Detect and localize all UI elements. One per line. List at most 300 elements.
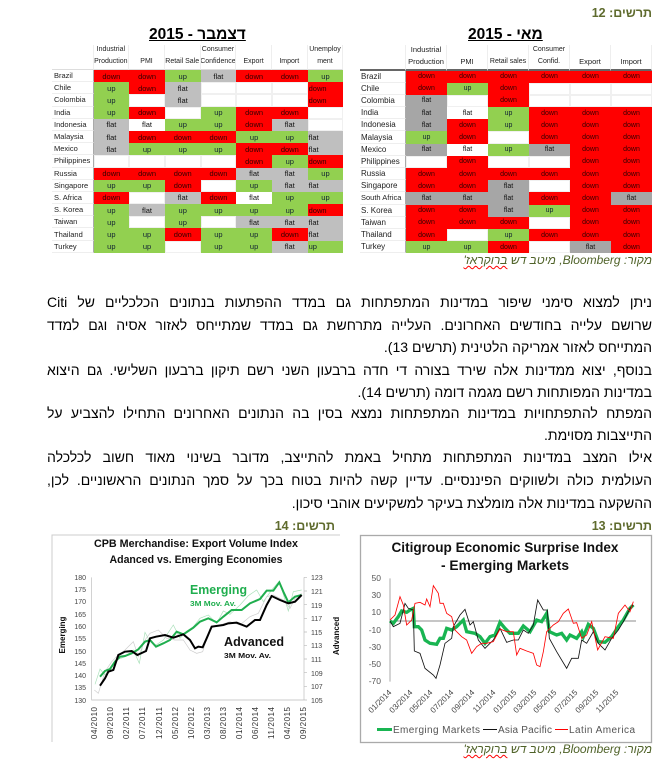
table: May 2015 heat map: down <box>623 244 640 251</box>
table: May 2015 heat map: flat <box>422 110 431 117</box>
table: December 2015 heat map: up <box>214 230 223 239</box>
chart 13 asia pacific line <box>390 600 633 678</box>
table: December 2015 heat map: Export <box>243 58 264 65</box>
chart 13 y axis labels: -30 <box>369 642 381 652</box>
table: May 2015 heat map: up <box>546 207 553 214</box>
table: May 2015 heat map: down <box>623 122 640 129</box>
chart 14 x axis labels: 01/2014 <box>235 706 244 739</box>
table: May 2015 heat map: down <box>623 110 640 117</box>
table: May 2015 heat map: down <box>418 207 435 214</box>
table: May 2015 heat map: down <box>582 207 599 214</box>
chart 14 x axis labels: 07/2011 <box>138 706 147 739</box>
chart 13 axes <box>390 578 636 682</box>
table: May 2015 heat map: flat <box>463 110 472 117</box>
table: December 2015 heat map: up <box>286 133 294 142</box>
chart 14 left axis labels: 140 <box>74 673 86 680</box>
chart 14 left axis labels: 170 <box>74 599 86 606</box>
chart 13 y axis labels: 50 <box>372 573 381 583</box>
table: May 2015 heat map: Thailand <box>361 230 392 239</box>
table: May 2015 heat map: down <box>541 232 558 239</box>
table: May 2015 heat map: down <box>500 85 517 92</box>
table: May 2015 heat map: down <box>459 183 476 190</box>
table: December 2015 heat map: flat <box>178 96 188 105</box>
table: May 2015 heat map: down <box>459 219 476 226</box>
table: December 2015 heat map: Retail Sale <box>165 58 199 65</box>
table: December 2015 heat map: down <box>281 230 299 239</box>
chart 14 right axis labels: 121 <box>311 589 323 596</box>
table: May 2015 heat map: down <box>541 134 558 141</box>
table: May 2015 heat map: down <box>623 219 640 226</box>
chart 13 x axis labels: 05/2015 <box>532 688 559 715</box>
table: May 2015 heat map: down <box>459 73 476 80</box>
table: May 2015 heat map: up <box>464 85 471 92</box>
table: May 2015 heat map: down <box>418 232 435 239</box>
chart 13 x axis labels: 09/2015 <box>574 688 601 715</box>
table: December 2015 heat map: Singapore <box>54 181 88 190</box>
table: December 2015 heat map: up <box>321 169 330 178</box>
table: December 2015 heat map: up <box>143 242 151 251</box>
table: December 2015 heat map: down <box>174 230 192 239</box>
table: December 2015 heat map: down <box>138 108 156 117</box>
chart 14 axis titles: Advanced <box>332 617 341 655</box>
heading: figure 12: תרשים: 12 <box>592 6 652 20</box>
heading: figure 14: תרשים: 14 <box>275 519 335 533</box>
table: May 2015 heat map: down <box>541 195 558 202</box>
table: May 2015 heat map: Turkey <box>361 242 385 251</box>
table: December 2015 heat map: flat <box>178 193 188 202</box>
table: December 2015 heat map: up <box>143 230 151 239</box>
chart 13 y axis labels <box>369 573 381 686</box>
table: December 2015 heat map: up <box>214 108 223 117</box>
table: December 2015 heat map: down <box>174 169 192 178</box>
table: May 2015 heat map: South Africa <box>361 193 401 202</box>
table: May 2015 heat map: Brazil <box>361 72 381 81</box>
chart 14 left axis labels: 145 <box>74 661 86 668</box>
table: December 2015 heat map: down <box>281 108 299 117</box>
source note: figures 13 and 14: מקור: Bloomberg, מיטב דש ברוקראז' <box>464 742 652 756</box>
chart 14 right axis labels: 117 <box>311 616 322 623</box>
chart 14 monthly thin lines <box>94 581 302 693</box>
table: May 2015 heat map: up <box>505 146 512 153</box>
table: May 2015 heat map: down <box>582 219 599 226</box>
table: December 2015 heat map: down <box>102 72 120 81</box>
table: December 2015 heat map: up <box>107 84 116 93</box>
table: December 2015 heat map: up <box>286 157 294 166</box>
table: December 2015 heat map: flat <box>106 120 116 129</box>
table: May 2015 heat map: up <box>423 134 430 141</box>
chart 14 x axis labels: 11/2014 <box>267 706 276 739</box>
table: May 2015 heat map: flat <box>463 195 472 202</box>
chart 14 axis titles: Emerging <box>58 616 67 653</box>
text block: body paragraphs <box>47 294 652 511</box>
chart 14 label: emerging <box>190 582 247 608</box>
table: December 2015 heat map: down <box>309 84 327 93</box>
table: December 2015 heat map: flat <box>106 145 116 154</box>
table: December 2015 heat map: Philippines <box>54 156 90 165</box>
table: December 2015 heat map: up <box>214 120 223 129</box>
table: May 2015 heat map: down <box>418 219 435 226</box>
table: December 2015 heat map: up <box>179 72 187 81</box>
table: May 2015 heat map: down <box>459 171 476 178</box>
chart 13 y axis labels: 10 <box>372 607 381 617</box>
text block: body paragraphs: בנוסף, יצוא ממדינות אלה שירד בצורה די חדה ברבעון השני רשם תיקון ברבעון השלישי. גם היצוא <box>47 362 652 378</box>
table: December 2015 heat map: up <box>250 230 258 239</box>
table: May 2015 heat map: down <box>500 97 517 104</box>
table: December 2015 heat map: flat <box>249 218 259 227</box>
table: December 2015 heat map: down <box>209 193 227 202</box>
table: December 2015 heat map: up <box>107 108 116 117</box>
chart 14 right axis labels: 105 <box>311 698 323 705</box>
table: May 2015 heat map: down <box>623 158 640 165</box>
chart 14 right axis labels <box>311 575 323 705</box>
text block: body paragraphs: התייצבות מסוימת. <box>544 427 652 443</box>
table: December 2015 heat map: Russia <box>54 169 77 178</box>
table: May 2015 heat map: down <box>582 195 599 202</box>
table: December 2015 heat map: down <box>209 169 227 178</box>
chart 14 x axis labels: 08/2013 <box>219 706 228 739</box>
chart 13 x axis labels: 03/2015 <box>512 688 539 715</box>
table: December 2015 heat map: flat <box>213 72 223 81</box>
chart 13 title: Citigroup Economic Surprise Index <box>392 540 619 555</box>
chart 14 title <box>94 538 299 566</box>
table: May 2015 heat map: Malaysia <box>361 133 393 142</box>
table: December 2015 heat map: flat <box>249 169 259 178</box>
table: May 2015 heat map: Philippines <box>361 157 400 166</box>
table: May 2015 heat map: down <box>582 171 599 178</box>
table: May 2015 heat map <box>360 45 652 253</box>
table: May 2015 heat map: PMI <box>460 56 474 66</box>
table: December 2015 heat map: up <box>321 72 330 81</box>
table: December 2015 heat map: up <box>179 206 187 215</box>
table: May 2015 heat map: down <box>541 122 558 129</box>
table: May 2015 heat map: Industrial Production <box>408 45 444 66</box>
table: December 2015 heat map: flat <box>285 169 295 178</box>
table: December 2015 heat map: up <box>286 193 294 202</box>
table: May 2015 heat map: down <box>418 85 435 92</box>
table: May 2015 heat map: flat <box>422 122 431 129</box>
chart 14 left axis labels: 150 <box>74 649 86 656</box>
table: May 2015 heat map: S. Korea <box>361 206 392 215</box>
chart 14 label: emerging: Emerging <box>190 582 247 597</box>
table: May 2015 heat map: flat <box>463 146 472 153</box>
table: May 2015 heat map: down <box>623 171 640 178</box>
chart 13 title: - Emerging Markets <box>441 558 569 573</box>
table: December 2015 heat map: Indonesia <box>54 120 87 129</box>
chart 14 right axis labels: 115 <box>311 630 322 637</box>
chart 14 left axis labels: 135 <box>74 685 86 692</box>
chart 14 left axis labels: 160 <box>74 624 86 631</box>
table: December 2015 heat map: down <box>245 120 263 129</box>
table: May 2015 heat map: up <box>505 110 512 117</box>
table: December 2015 heat map: Import <box>279 58 299 65</box>
chart 13 legend: Latin America <box>569 725 635 736</box>
table: December 2015 heat map: down <box>281 72 299 81</box>
table: May 2015 heat map: down <box>418 183 435 190</box>
chart 13 y axis labels: -70 <box>369 676 381 686</box>
table: May 2015 heat map: Colombia <box>361 96 395 105</box>
table: May 2015 heat map: flat <box>586 244 595 251</box>
table: December 2015 heat map: Consumer Confidence <box>201 46 236 65</box>
table: December 2015 heat map: S. Korea <box>54 205 83 214</box>
table: December 2015 heat map: up <box>321 193 330 202</box>
table: May 2015 heat map: down <box>418 73 435 80</box>
chart 13 legend: Asia Pacific <box>498 725 552 736</box>
chart 13 x axis labels: 07/2015 <box>553 688 580 715</box>
chart 14 x axis labels: 04/2010 <box>90 706 99 739</box>
table: December 2015 heat map: PMI <box>140 58 153 65</box>
table: May 2015 heat map: down <box>459 122 476 129</box>
source note: figure 12: מקור: Bloomberg, מיטב דש ברוקראז' <box>464 253 652 267</box>
table: December 2015 heat map: flat <box>249 193 259 202</box>
table: December 2015 heat map: Unemploy ment <box>309 46 341 65</box>
table: May 2015 heat map: down <box>582 122 599 129</box>
chart 14 emerging 3M line <box>100 582 302 677</box>
chart 14 x axis labels: 02/2011 <box>122 706 131 739</box>
table: December 2015 heat map: up <box>107 96 116 105</box>
chart 14 left axis labels: 130 <box>74 698 86 705</box>
table: December 2015 heat map: down <box>245 157 263 166</box>
chart 14 title: CPB Merchandise: Export Volume Index <box>94 538 299 550</box>
chart 13 x axis labels: 03/2014 <box>388 688 415 715</box>
table: December 2015 heat map: down <box>309 96 327 105</box>
table: May 2015 heat map: down <box>582 146 599 153</box>
table: May 2015 heat map: down <box>500 73 517 80</box>
table: May 2015 heat map: down <box>541 110 558 117</box>
table: December 2015 heat map: flat <box>285 181 295 190</box>
text block: body paragraphs: במדינות המפותחות רשם מגמה דומה (תרשים 14). <box>358 384 652 400</box>
table: May 2015 heat map: down <box>623 232 640 239</box>
chart 14 x axis labels: 03/2013 <box>203 706 212 739</box>
chart 14 left axis labels: 175 <box>74 587 86 594</box>
chart 13 x axis labels: 01/2015 <box>492 688 519 715</box>
table: May 2015 heat map: flat <box>627 195 636 202</box>
table: December 2015 heat map: Taiwan <box>54 217 77 226</box>
table: May 2015 heat map: down <box>459 158 476 165</box>
chart 14 label: advanced <box>224 634 284 660</box>
table: May 2015 heat map: Indonesia <box>361 120 396 129</box>
table: December 2015 heat map: down <box>245 145 263 154</box>
table: December 2015 heat map: down <box>245 108 263 117</box>
chart 14 x axis labels: 12/2011 <box>155 706 164 739</box>
table: December 2015 heat map: Turkey <box>54 242 77 251</box>
chart 14 right axis labels: 113 <box>311 643 322 650</box>
table: May 2015 heat map: up <box>464 244 471 251</box>
table: May 2015 heat map: flat <box>504 195 513 202</box>
table: December 2015 heat map: flat <box>285 242 295 251</box>
table: May 2015 heat map: up <box>505 122 512 129</box>
table: May 2015 heat map: down <box>623 146 640 153</box>
chart 14 advanced 3M line <box>100 595 302 686</box>
table: May 2015 heat map: down <box>500 244 517 251</box>
table: May 2015 heat map: down <box>459 134 476 141</box>
table: December 2015 heat map: Colombia <box>54 95 86 104</box>
chart: figure 13 economic surprise index <box>360 536 652 742</box>
chart 14 label: advanced: Advanced <box>224 634 284 649</box>
text block: body paragraphs: אילו המצב במדינות המתפתחות מתחיל באמת להתייצב, מדובר בשינוי מאוד חשוב לכלכלה <box>47 449 652 465</box>
table: December 2015 heat map: down <box>174 133 192 142</box>
table: December 2015 heat map: down <box>102 169 120 178</box>
table: May 2015 heat map: Retail sales <box>490 58 526 64</box>
table: May 2015 heat map: down <box>623 207 640 214</box>
chart 14 right axis labels: 111 <box>311 657 322 664</box>
table: December 2015 heat map: down <box>138 84 156 93</box>
table: December 2015 heat map: up <box>107 181 116 190</box>
table: December 2015 heat map: up <box>286 206 294 215</box>
table: December 2015 heat map: up <box>250 242 258 251</box>
table: December 2015 heat map: up <box>250 181 258 190</box>
table: December 2015 heat map: down <box>102 193 120 202</box>
table: May 2015 heat map: down <box>541 73 558 80</box>
table: December 2015 heat map: down <box>138 133 156 142</box>
table: December 2015 heat map: flat <box>309 145 319 154</box>
chart 13 x axis labels <box>367 688 621 715</box>
table: December 2015 heat map: up <box>179 145 187 154</box>
table: December 2015 heat map: flat <box>142 206 152 215</box>
chart 13 y axis labels: -50 <box>369 659 381 669</box>
table: December 2015 heat map: up <box>143 181 151 190</box>
table: December 2015 heat map: up <box>107 242 116 251</box>
table: May 2015 heat map: flat <box>422 146 431 153</box>
table: December 2015 heat map: down <box>138 169 156 178</box>
table: December 2015 heat map: S. Africa <box>54 193 82 202</box>
table: May 2015 heat map: down <box>541 171 558 178</box>
chart 14 x axis labels: 06/2014 <box>251 706 260 739</box>
table: December 2015 heat map: Chile <box>54 83 71 92</box>
chart 14 title: Adanced vs. Emerging Economies <box>110 554 282 566</box>
table: May 2015 heat map: Russia <box>361 169 385 178</box>
chart 14 right axis labels: 109 <box>311 671 323 678</box>
table: May 2015 heat map: flat <box>422 97 431 104</box>
table: December 2015 heat map: Malaysia <box>54 132 84 141</box>
table: December 2015 heat map: flat <box>142 120 152 129</box>
table: May 2015 heat map: India <box>361 108 378 117</box>
table: May 2015 heat map: down <box>500 219 517 226</box>
table: May 2015 heat map: flat <box>422 195 431 202</box>
title: May 2015: מאי - 2015 <box>468 26 543 43</box>
table: December 2015 heat map: flat <box>106 133 116 142</box>
table: December 2015 heat map: Thailand <box>54 230 83 239</box>
table: December 2015 heat map: up <box>214 206 223 215</box>
chart 13 emerging markets line <box>390 605 633 644</box>
table: December 2015 heat map: up <box>143 145 151 154</box>
table: December 2015 heat map: flat <box>285 120 295 129</box>
chart 14 x axis labels: 09/2010 <box>106 706 115 739</box>
text block: body paragraphs: המפתח להתפתחויות במדינות המתפתחות נמצא בסין בה הנתונים האחרונים התחילו להצביע על <box>47 405 652 421</box>
table: May 2015 heat map: flat <box>545 146 554 153</box>
table: May 2015 heat map: down <box>623 73 640 80</box>
chart 14 left axis labels: 155 <box>74 636 86 643</box>
table: December 2015 heat map: up <box>214 242 223 251</box>
table: December 2015 heat map: Mexico <box>54 144 78 153</box>
chart 14 right axis labels: 107 <box>311 684 323 691</box>
table: December 2015 heat map <box>52 45 343 253</box>
table: May 2015 heat map: down <box>459 207 476 214</box>
text block: body paragraphs: המתייחס לאזור אמריקה הלטינית (תרשים 13). <box>384 339 652 355</box>
table: May 2015 heat map: Import <box>620 56 642 66</box>
chart: figure 14 export volume index <box>52 535 341 742</box>
table: December 2015 heat map: flat <box>309 230 319 239</box>
chart 13 y axis labels: 30 <box>372 590 381 600</box>
chart 14 left axis labels: 180 <box>74 575 86 582</box>
table: December 2015 heat map: flat <box>309 218 319 227</box>
table: May 2015 heat map: down <box>623 134 640 141</box>
chart 13 x axis labels: 11/2015 <box>594 688 621 714</box>
table: December 2015 heat map: up <box>179 218 187 227</box>
chart 14 x axis labels <box>90 706 308 739</box>
table: May 2015 heat map: down <box>582 183 599 190</box>
text block: body paragraphs: ניתן למצוא סימני שיפור במדינות המתפתחות גם במדד ההפתעות בנתונים הכלכליים של Citi <box>47 294 652 310</box>
table: December 2015 heat map: down <box>209 133 227 142</box>
chart 14 left axis labels <box>74 575 86 705</box>
table: December 2015 heat map: flat <box>309 133 319 142</box>
table: December 2015 heat map: up <box>107 230 116 239</box>
table: December 2015 heat map: India <box>54 108 70 117</box>
table: December 2015 heat map: down <box>174 181 192 190</box>
table: December 2015 heat map: up <box>250 133 258 142</box>
table: December 2015 heat map: flat <box>285 218 295 227</box>
table: May 2015 heat map: Singapore <box>361 181 397 190</box>
title: December 2015: דצמבר - 2015 <box>149 26 246 43</box>
chart 14 x axis labels: 09/2015 <box>299 706 308 739</box>
table: December 2015 heat map: down <box>309 206 327 215</box>
chart 13 title <box>392 540 619 573</box>
table: May 2015 heat map: down <box>500 171 517 178</box>
text block: body paragraphs: העולמית כולה ולשווקים הפיננסיים. עדיין קשה להיות בטוח בכך על סמך הנתונים הראשוניים. לכן, <box>47 472 652 488</box>
table: December 2015 heat map: up <box>250 206 258 215</box>
chart 14 right axis labels: 123 <box>311 575 323 582</box>
table: May 2015 heat map: Taiwan <box>361 218 386 227</box>
table: December 2015 heat map: up <box>107 218 116 227</box>
chart 13 x axis labels: 05/2014 <box>408 688 435 715</box>
chart 14 x axis labels: 10/2012 <box>187 706 196 739</box>
table: May 2015 heat map: down <box>582 232 599 239</box>
table: May 2015 heat map: Export <box>579 56 601 66</box>
table: May 2015 heat map: down <box>418 171 435 178</box>
table: December 2015 heat map: down <box>309 157 327 166</box>
table: December 2015 heat map: down <box>281 145 299 154</box>
table: May 2015 heat map: flat <box>504 207 513 214</box>
table: December 2015 heat map: up <box>214 145 223 154</box>
table: December 2015 heat map: Brazil <box>54 71 73 80</box>
table: December 2015 heat map: up <box>309 242 317 251</box>
chart 13 x axis labels: 11/2014 <box>471 688 498 714</box>
table: May 2015 heat map: down <box>582 158 599 165</box>
chart 14 label: emerging: 3M Mov. Av. <box>190 601 236 608</box>
chart 14 axis titles <box>58 616 341 655</box>
text block: body paragraphs: שרושם עלייה בחודשים האחרונים. העלייה מתרחשת גם במדד שמתייחס לאזור אסיה וגם למדד <box>47 317 652 333</box>
chart 14 right axis labels: 119 <box>311 603 322 610</box>
table: May 2015 heat map: down <box>582 134 599 141</box>
chart 13 x axis labels: 07/2014 <box>429 688 456 715</box>
table: December 2015 heat map: down <box>245 72 263 81</box>
table: December 2015 heat map: down <box>138 72 156 81</box>
table: May 2015 heat map: down <box>582 73 599 80</box>
table: December 2015 heat map: up <box>107 206 116 215</box>
table: December 2015 heat map: up <box>179 120 187 129</box>
table: May 2015 heat map: down <box>623 183 640 190</box>
chart 13 latin america line <box>390 586 633 667</box>
chart 14 x axis labels: 04/2015 <box>283 706 292 739</box>
table: May 2015 heat map: down <box>582 110 599 117</box>
table: May 2015 heat map: flat <box>504 183 513 190</box>
table: May 2015 heat map: Chile <box>361 84 379 93</box>
table: May 2015 heat map: up <box>423 244 430 251</box>
chart 14 x axis labels: 05/2012 <box>171 706 180 739</box>
heading: figure 13: תרשים: 13 <box>592 519 652 533</box>
table: December 2015 heat map: flat <box>178 84 188 93</box>
chart 13 legend <box>377 725 635 736</box>
chart 14 left axis labels: 165 <box>74 612 86 619</box>
